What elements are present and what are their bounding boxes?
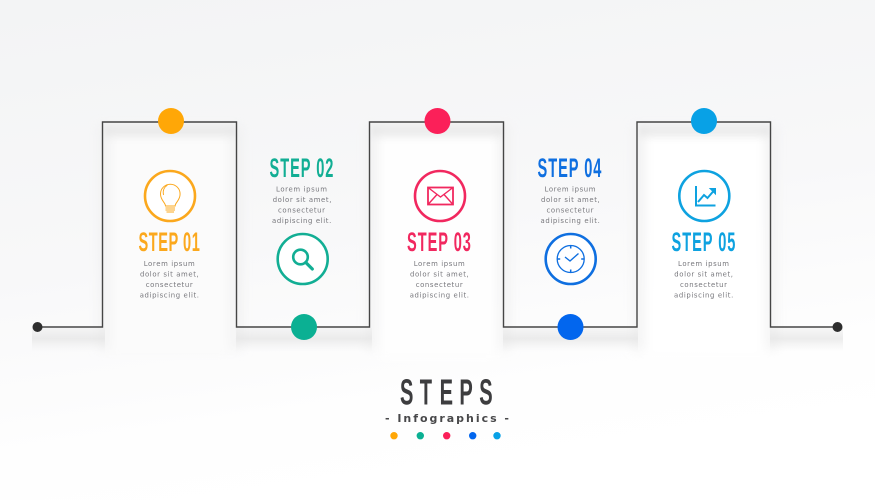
text: step 4 description: dolor sit amet,	[541, 196, 600, 204]
heading: step 01: STEP 01	[138, 226, 200, 257]
text: step 1 description: Lorem ipsum	[144, 260, 195, 268]
text: step 5 description	[674, 260, 733, 300]
text: step 2 description: consectetur	[278, 206, 325, 214]
heading: step 02: STEP 02	[270, 152, 334, 183]
text: step 3 description: Lorem ipsum	[414, 260, 465, 268]
legend dots	[390, 432, 501, 439]
step 1 block	[138, 171, 200, 300]
node: step 1	[158, 108, 184, 134]
text: step 1 description: dolor sit amet,	[140, 270, 199, 278]
icon: envelope	[415, 171, 465, 221]
heading: step 05: STEP 05	[672, 226, 736, 257]
text: step 1 description	[140, 260, 199, 300]
text: step 2 description	[272, 185, 331, 225]
step 2 block	[270, 152, 334, 284]
icon: magnifier	[278, 234, 328, 284]
text: step 4 description	[540, 185, 600, 225]
step 5 block	[672, 171, 736, 300]
text: step 3 description: adipiscing elit.	[410, 292, 469, 300]
title: STEPS: STEPS	[400, 372, 493, 413]
step 4 block	[538, 152, 602, 284]
node: step 2	[291, 314, 317, 340]
soft shadows and white cards	[32, 123, 843, 358]
text: step 4 description: consectetur	[546, 206, 594, 214]
text: step 3 description	[410, 260, 469, 300]
text: step 1 description: consectetur	[146, 281, 193, 289]
text: step 5 description: adipiscing elit.	[674, 292, 733, 300]
text: step 3 description: dolor sit amet,	[410, 270, 469, 278]
heading: step 03: STEP 03	[407, 226, 472, 257]
node: step 3	[424, 108, 450, 134]
text: step 2 description: dolor sit amet,	[273, 196, 331, 204]
step 3 block	[407, 171, 472, 300]
text: step 2 description: adipiscing elit.	[272, 217, 331, 225]
icon: clock	[546, 234, 596, 284]
timeline start dot	[32, 322, 42, 332]
node: step 5	[691, 108, 717, 134]
text: step 4 description: adipiscing elit.	[540, 217, 600, 225]
node: step 4	[558, 314, 584, 340]
timeline end dot	[832, 322, 842, 332]
text: step 1 description: adipiscing elit.	[140, 292, 199, 300]
text: step 5 description: consectetur	[680, 281, 727, 289]
text: step 2 description: Lorem ipsum	[276, 185, 327, 193]
icon: growth chart	[679, 171, 729, 221]
subtitle: Infographics: - Infographics -	[385, 412, 509, 425]
icon: light bulb	[145, 171, 195, 221]
heading: step 04: STEP 04	[538, 152, 602, 183]
stepped timeline line	[38, 122, 838, 327]
text: step 5 description: Lorem ipsum	[678, 260, 729, 268]
text: step 3 description: consectetur	[416, 281, 463, 289]
text: step 4 description: Lorem ipsum	[544, 185, 596, 193]
text: step 5 description: dolor sit amet,	[674, 270, 733, 278]
